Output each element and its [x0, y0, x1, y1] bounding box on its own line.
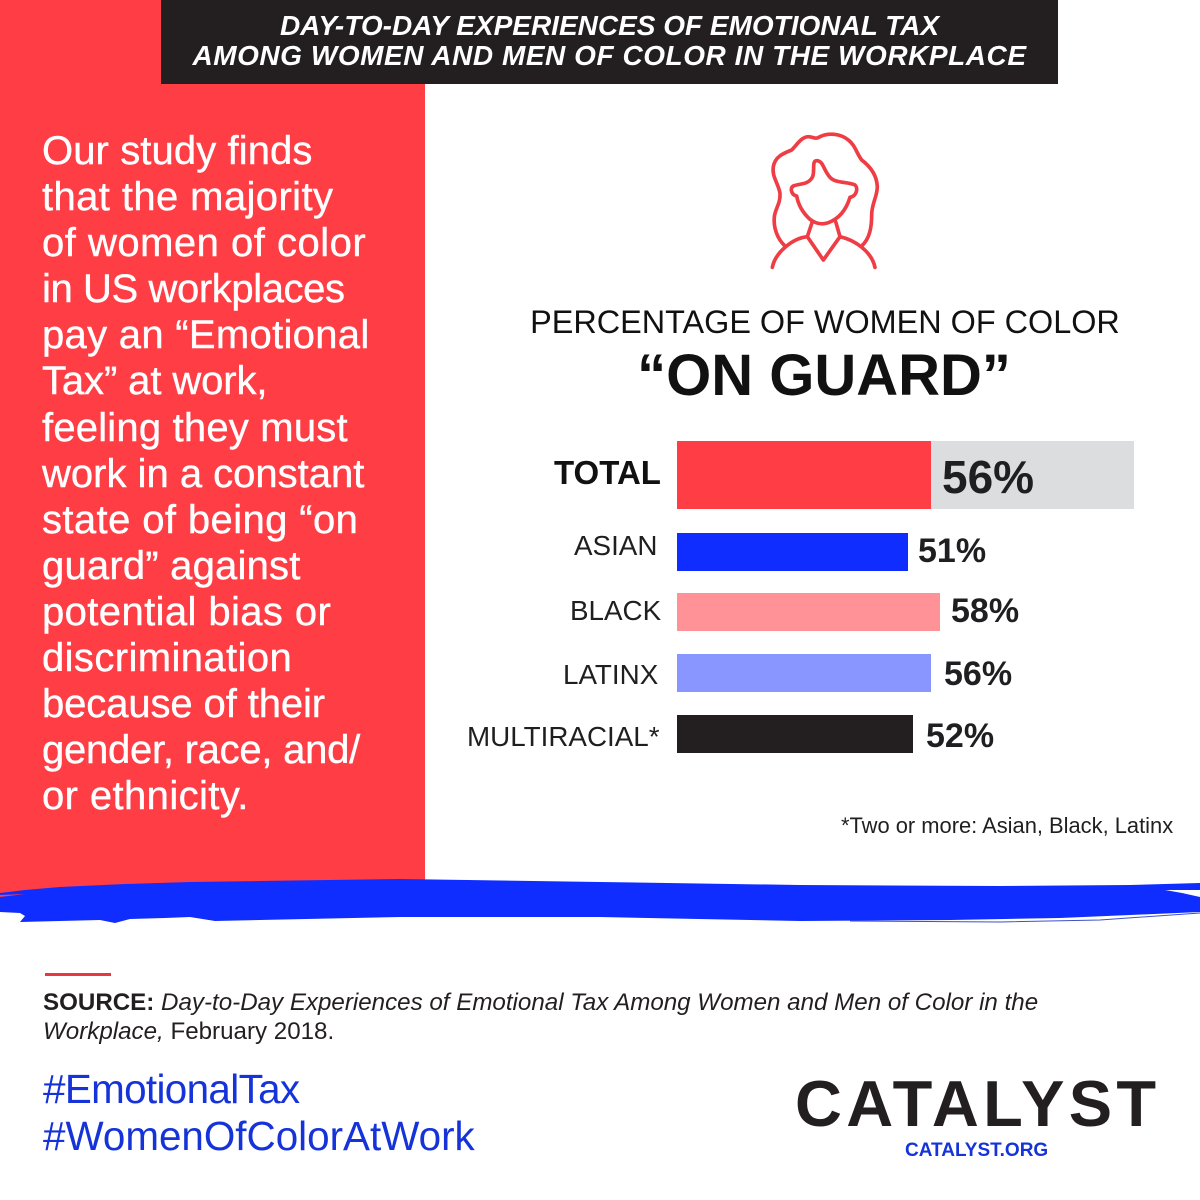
logo: catalyst wordmark: CATALYST [795, 1067, 1160, 1140]
chart row: asian: ASIAN [574, 530, 657, 561]
text block: study finding: gender, race, and/ [42, 728, 360, 772]
logo url: CATALYST.ORG [905, 1140, 1048, 1161]
chart row: total: TOTAL [554, 454, 661, 491]
text block: study finding: guard” against [42, 544, 301, 588]
text block: study finding: work in a constant [42, 452, 364, 496]
chart row: black [570, 592, 1019, 631]
text block: study finding: because of their [42, 682, 325, 726]
chart row: multiracial [467, 715, 994, 755]
chart row: black: BLACK [570, 595, 661, 626]
chart row: multiracial: MULTIRACIAL* [467, 721, 660, 752]
source text [43, 989, 1038, 1045]
accent rule [45, 973, 111, 976]
text block: study finding: Tax” at work, [42, 359, 267, 403]
heading: on guard: “ON GUARD” [637, 343, 1011, 408]
text block: study finding [42, 129, 370, 818]
icon: woman outline [770, 132, 880, 270]
chart row: black: 58% [951, 592, 1019, 630]
chart row: total [554, 441, 1134, 509]
text block: study finding: potential bias or [42, 590, 331, 634]
chart row: latinx [563, 654, 1012, 693]
text block: study finding: feeling they must [42, 406, 348, 450]
heading: chart title: PERCENTAGE OF WOMEN OF COLOR [530, 304, 1120, 340]
chart row: asian [574, 530, 986, 571]
title banner: AMONG WOMEN AND MEN OF COLOR IN THE WORKPLACE [192, 40, 1027, 71]
text block: study finding: or ethnicity. [42, 774, 249, 818]
text block: study finding: discrimination [42, 636, 292, 680]
blue brush stroke [0, 879, 1200, 923]
footnote: *Two or more: Asian, Black, Latinx [841, 813, 1173, 838]
chart row: latinx: 56% [944, 655, 1012, 693]
source text: SOURCE: Day-to-Day Experiences of Emotional Tax Among Women and Men of Color in the [43, 989, 1038, 1016]
title banner: DAY-TO-DAY EXPERIENCES OF EMOTIONAL TAX [280, 10, 939, 41]
source text: Workplace, February 2018. [43, 1018, 334, 1045]
chart row: total: 56% [942, 451, 1034, 503]
text block: study finding: of women of color [42, 221, 366, 265]
hashtags: #EmotionalTax [43, 1066, 299, 1112]
text block: study finding: that the majority [42, 175, 333, 219]
chart row: multiracial: 52% [926, 717, 994, 755]
text block: study finding: Our study finds [42, 129, 313, 173]
panel: red left column [0, 0, 425, 900]
hashtags: #WomenOfColorAtWork [43, 1112, 475, 1158]
chart row: latinx: LATINX [563, 659, 658, 690]
bar chart [467, 441, 1134, 755]
text block: study finding: state of being “on [42, 498, 358, 542]
text block: study finding: pay an “Emotional [42, 313, 370, 357]
hashtags [43, 1066, 475, 1158]
text block: study finding: in US workplaces [42, 267, 345, 311]
chart row: asian: 51% [918, 532, 986, 570]
title banner [161, 0, 1058, 84]
